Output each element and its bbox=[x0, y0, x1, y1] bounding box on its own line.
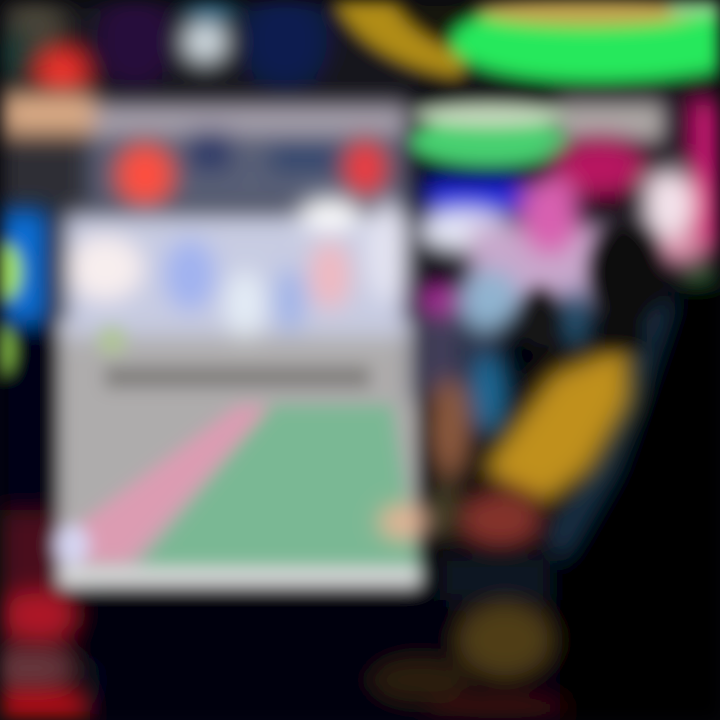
panel: upper pale display bbox=[62, 197, 410, 339]
middle band: light rail bbox=[0, 92, 670, 210]
panel: pink stripe bbox=[72, 406, 270, 562]
person: arm and hand bbox=[458, 490, 542, 550]
lower left red carpet bbox=[0, 510, 274, 720]
green sign centre bbox=[410, 103, 570, 167]
panel: small green mark bbox=[97, 325, 127, 355]
panel: bottom highlight bbox=[54, 525, 420, 586]
panel: green floor bbox=[135, 405, 420, 580]
crowd: purple and skin tones bbox=[378, 270, 589, 540]
red lights bbox=[115, 140, 387, 207]
person: heads bbox=[520, 220, 663, 350]
green sign top right bbox=[450, 0, 720, 82]
top band: dark ceiling with blobs bbox=[0, 0, 720, 94]
blue sign and magenta highlights bbox=[415, 90, 720, 305]
left edge: blue sign and green marks bbox=[0, 210, 48, 500]
person: mustard shirt bbox=[480, 342, 630, 505]
person: dark right silhouette bbox=[545, 280, 720, 720]
panel: dark text strip bbox=[105, 366, 370, 388]
bottom dark foreground bbox=[90, 555, 570, 720]
panel: grey body bbox=[58, 320, 418, 588]
main panel bbox=[54, 197, 420, 588]
yellow arc sign bbox=[335, 0, 478, 78]
